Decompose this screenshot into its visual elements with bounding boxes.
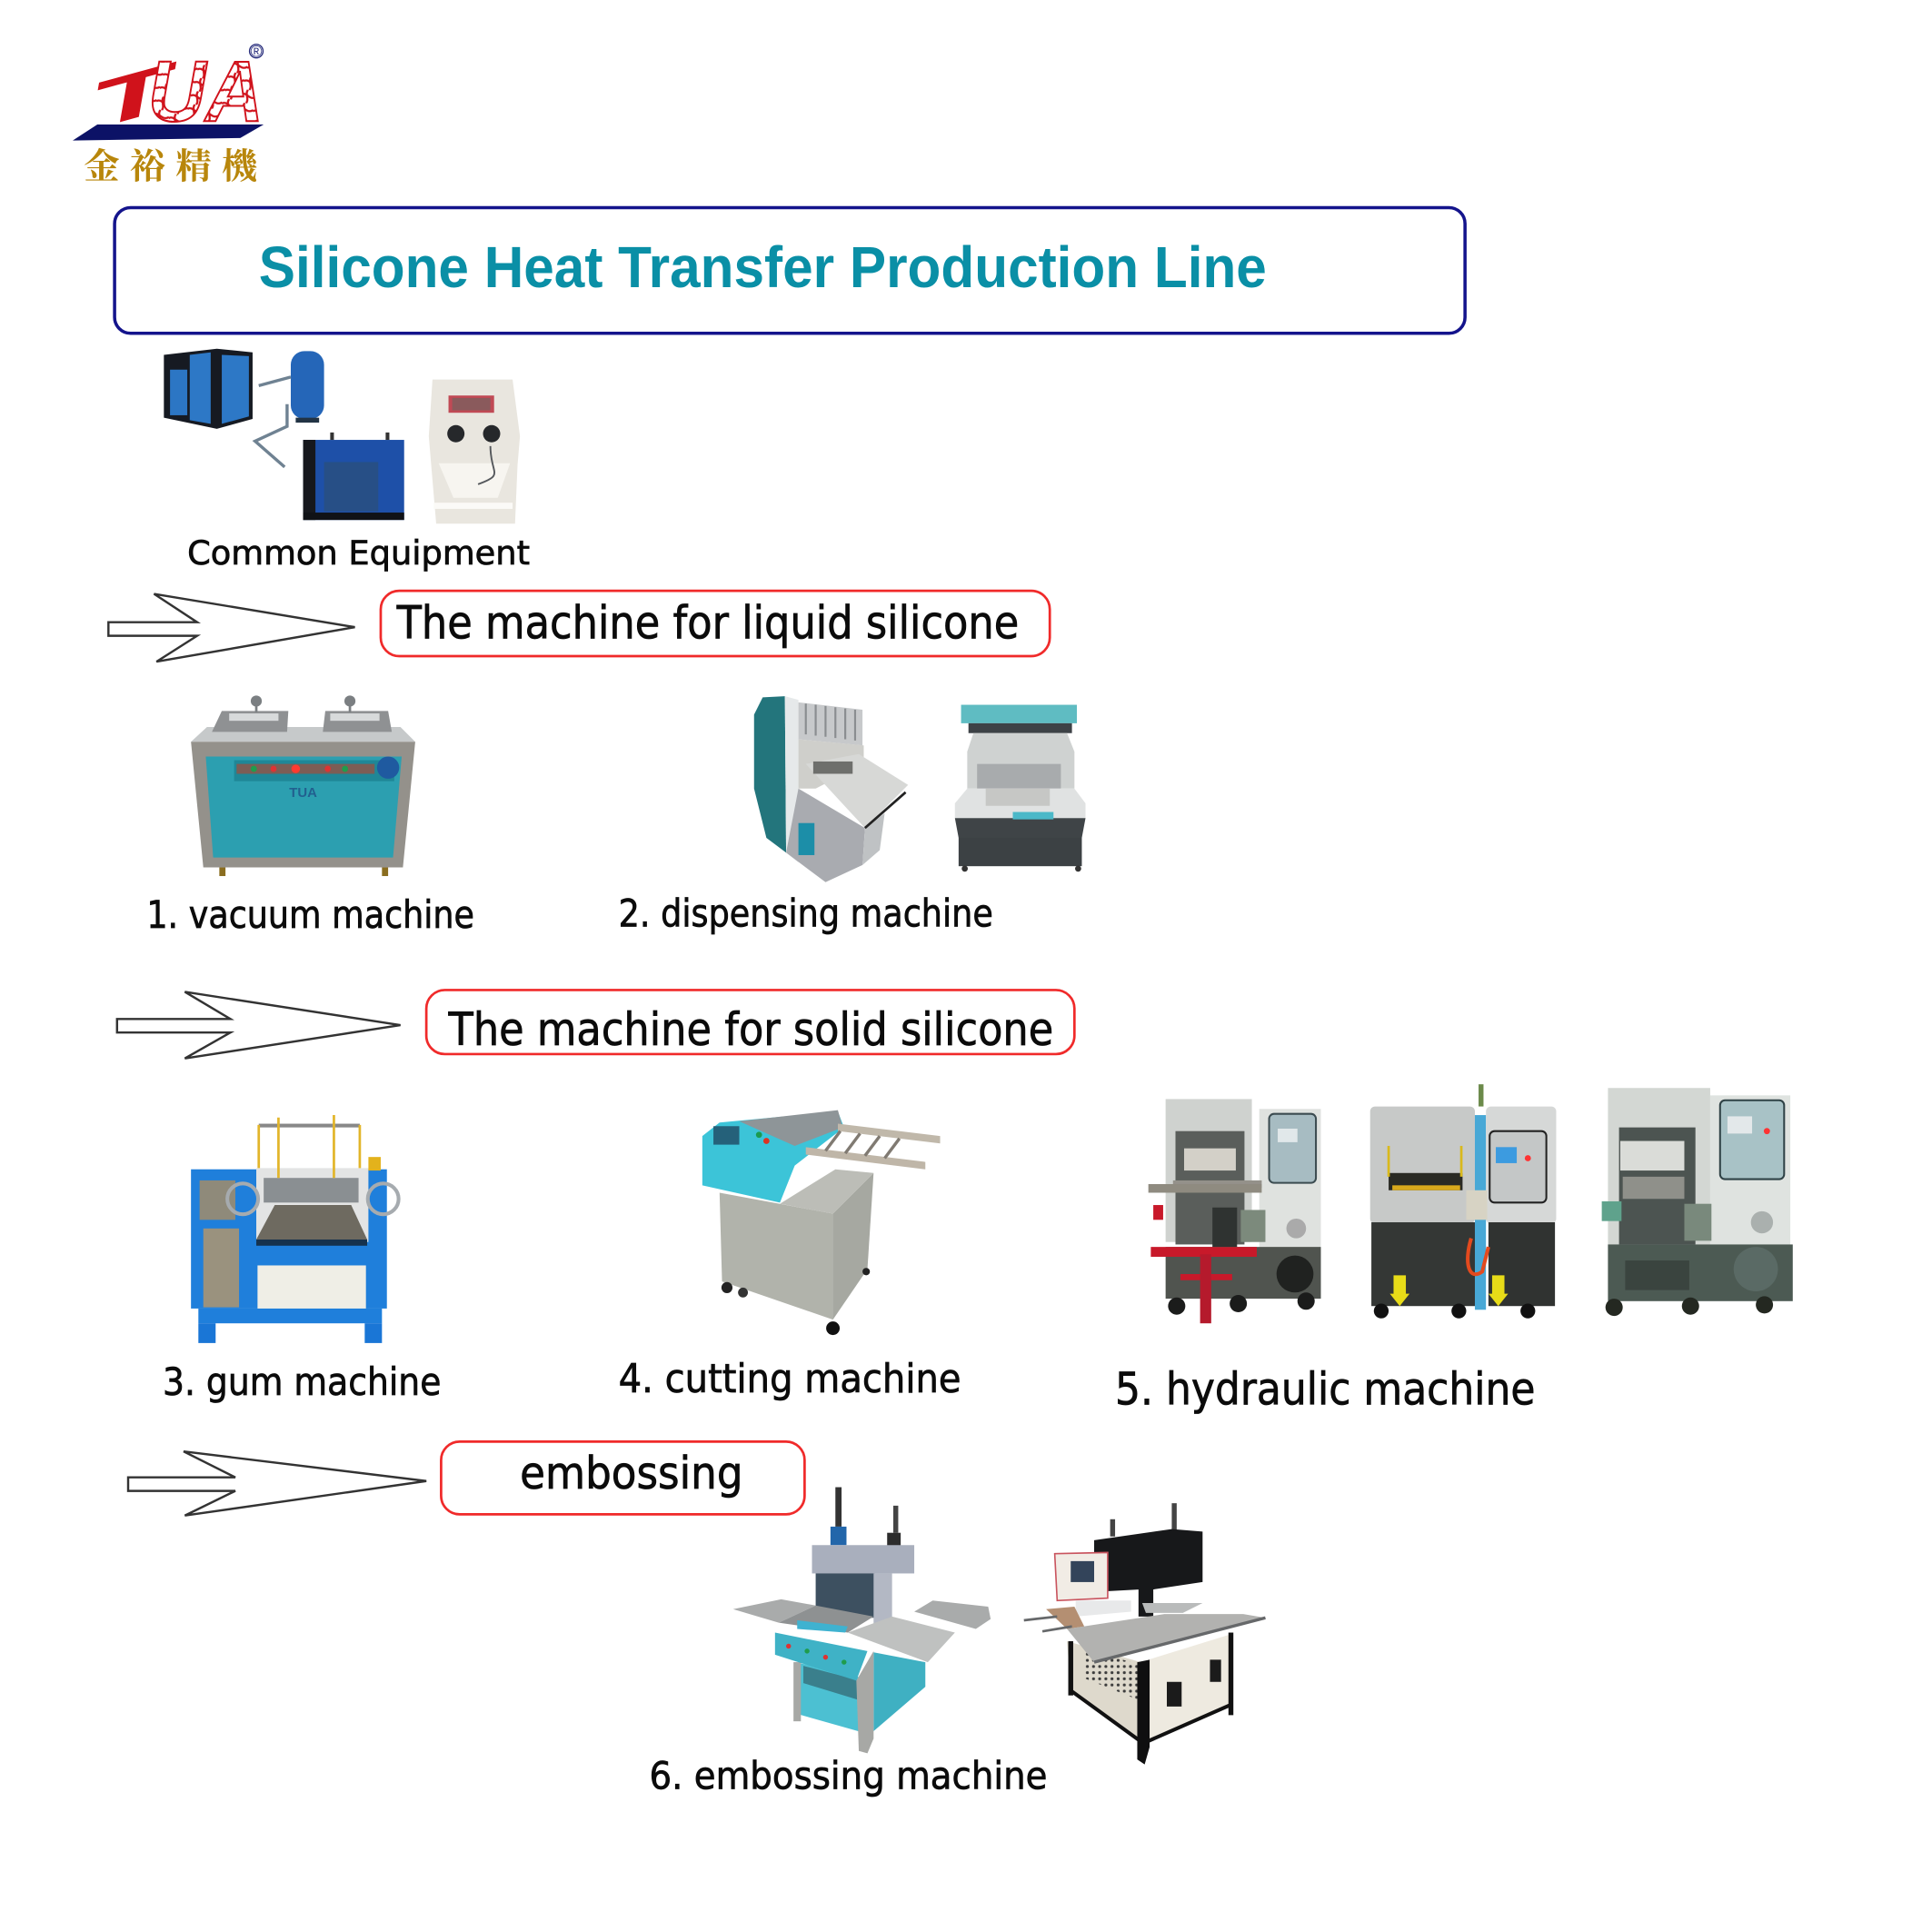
machine: embossing machine pair xyxy=(733,1488,1265,1765)
caption: gum machine: 3. gum machine xyxy=(163,1359,441,1404)
front-view dispenser xyxy=(955,705,1086,871)
caption: hydraulic machine: 5. hydraulic machine xyxy=(1115,1364,1535,1416)
machine: vacuum machine: TUA xyxy=(289,786,317,801)
caption: embossing machine: 6. embossing machine xyxy=(650,1754,1047,1798)
press with green base xyxy=(1602,1088,1793,1316)
side-view dispenser xyxy=(754,696,908,882)
icon: air compressor xyxy=(164,349,253,429)
icon: air tank and pipes xyxy=(255,351,324,467)
arrow: to solid silicone xyxy=(117,991,401,1059)
heading: liquid silicone: The machine for liquid silicone xyxy=(396,595,1019,649)
icon: sandblasting cabinet xyxy=(429,380,520,523)
caption: cutting machine: 4. cutting machine xyxy=(619,1357,961,1402)
machine: cutting machine xyxy=(702,1110,941,1335)
caption: dispensing machine: 2. dispensing machine xyxy=(619,891,993,936)
arrow: to liquid silicone xyxy=(108,594,354,662)
caption: vacuum machine: 1. vacuum machine xyxy=(146,892,474,937)
title panel xyxy=(115,207,1465,334)
teal embossing machine xyxy=(733,1488,991,1753)
logo: TUA brand mark: UA xyxy=(148,44,264,140)
machine: hydraulic machine trio xyxy=(1149,1084,1793,1323)
press with red frame xyxy=(1149,1099,1320,1323)
logo: TUA brand mark: 金裕精機 xyxy=(84,147,259,187)
caption: common equipment: Common Equipment xyxy=(187,533,530,573)
heading: embossing xyxy=(441,1441,804,1514)
icon: air dryer xyxy=(304,433,404,520)
logo: TUA brand mark xyxy=(73,42,264,187)
heading: embossing: embossing xyxy=(520,1448,743,1499)
machine: dispensing machine pair xyxy=(754,696,1086,882)
logo: TUA brand mark: ® xyxy=(251,42,263,60)
machine: vacuum machine xyxy=(191,695,415,876)
common equipment image xyxy=(164,349,520,523)
machine: gum machine xyxy=(191,1115,399,1343)
arrow: to embossing xyxy=(128,1451,426,1516)
heading: solid silicone: The machine for solid silicone xyxy=(448,1002,1053,1056)
title panel: Silicone Heat Transfer Production Line xyxy=(259,234,1267,300)
logo: TUA brand mark: T xyxy=(86,46,181,145)
black embossing machine xyxy=(1024,1503,1265,1765)
press with blue strip xyxy=(1370,1084,1556,1319)
